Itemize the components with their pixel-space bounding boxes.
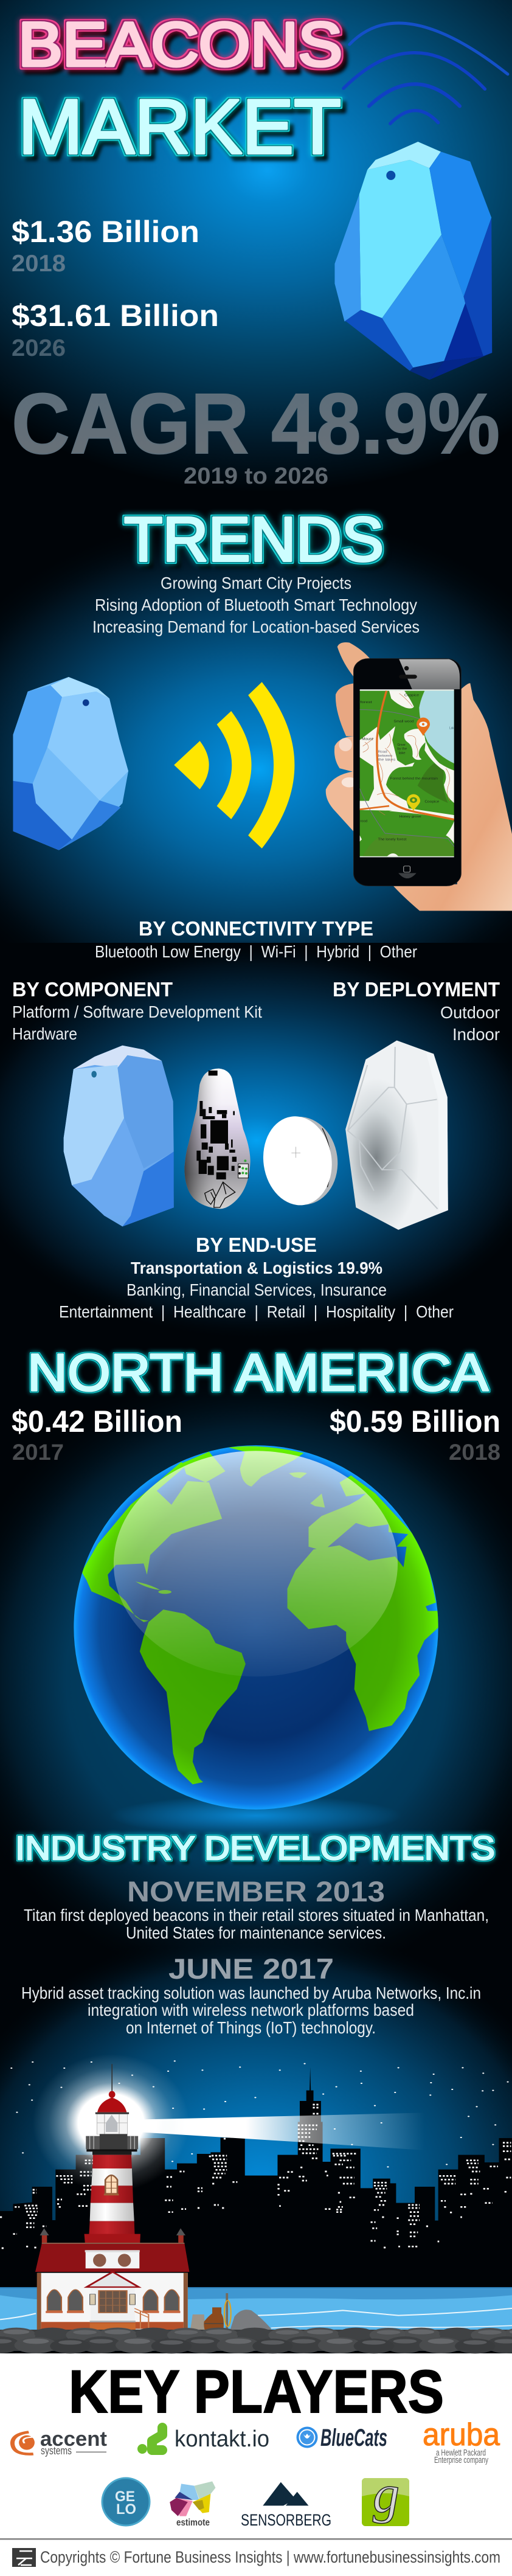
phone screen map: Grove	[397, 743, 406, 747]
skyline	[0, 2067, 512, 2288]
segment: end-use: Banking, Financial Services, Insurance	[126, 1280, 387, 1299]
icon: blue faceted beacon	[334, 142, 492, 380]
stat: North America 2017	[12, 1404, 182, 1465]
phone screen map: Honey grove	[400, 815, 421, 819]
stat: 2026 market value	[12, 299, 219, 361]
icon: blue signal arcs	[344, 23, 508, 123]
phone screen map	[360, 689, 454, 857]
lighthouse	[35, 2064, 189, 2335]
text block: trends list	[92, 574, 420, 636]
footer background: white panel	[0, 2353, 512, 2576]
stat: North America 2018: 2018	[449, 1440, 500, 1465]
development: June 2017: integration with wireless network platforms based	[88, 2001, 414, 2019]
heading: Trends: TRENDS	[124, 504, 384, 574]
phone screen map: rood	[360, 820, 367, 824]
segment: connectivity type: BY CONNECTIVITY TYPE	[139, 917, 373, 940]
text block: trends list: Growing Smart City Projects	[161, 574, 351, 592]
stat: 2018 market value: 2018	[12, 251, 66, 277]
phone screen map: The lonely forest	[378, 838, 407, 842]
icon: beacon casing	[64, 1046, 174, 1226]
development: November 2013: United States for maintenance services.	[126, 1923, 386, 1942]
logo: aruba: a Hewlett Packard	[436, 2448, 486, 2458]
stat: North America 2017: 2017	[12, 1440, 64, 1465]
logo: estimote: estimote	[176, 2518, 210, 2528]
stat: 2026 market value: $31.61 Billion	[12, 299, 219, 333]
development: November 2013: NOVEMBER 2013	[127, 1875, 385, 1908]
icon: hand holding phone with map	[326, 642, 512, 911]
icon: light blue beacon left	[13, 677, 128, 850]
phone screen map: Mount	[362, 738, 373, 741]
stat: CAGR: 2019 to 2026	[184, 463, 328, 489]
icon: globe	[74, 1445, 438, 1836]
heading: Key Players: KEY PLAYERS	[69, 2358, 444, 2425]
logo: Sensorberg	[241, 2482, 331, 2529]
stat: North America 2018: $0.59 Billion	[330, 1404, 500, 1439]
stat: North America 2017: $0.42 Billion	[12, 1404, 182, 1439]
phone screen map: the lakes	[378, 759, 395, 762]
segment: end-use: BY END-USE	[196, 1234, 317, 1256]
phone screen map: forest	[360, 701, 372, 704]
lighthouse glow	[33, 2054, 189, 2192]
decorative rocks row	[0, 2327, 512, 2354]
icon: beacon hardware parts	[64, 1041, 448, 1230]
logo: green g app icon: g	[373, 2465, 400, 2524]
development: June 2017: on Internet of Things (IoT) technology.	[126, 2018, 376, 2037]
logo: GELO	[102, 2478, 150, 2526]
heading: Industry Developments: INDUSTRY DEVELOPMENTS	[15, 1829, 495, 1867]
icon: coin battery	[258, 1112, 344, 1210]
segment: end-use: Transportation & Logistics 19.9%	[131, 1258, 382, 1277]
stat: 2026 market value: 2026	[12, 335, 66, 361]
divider	[0, 2538, 512, 2540]
phone screen map: Road	[378, 750, 387, 754]
segment: deployment: Outdoor	[440, 1003, 500, 1022]
phone screen map: lake	[399, 751, 406, 755]
segment: end-use	[59, 1234, 454, 1321]
segment: component: BY COMPONENT	[12, 978, 173, 1001]
logo: estimote	[170, 2481, 215, 2528]
segment: deployment: BY DEPLOYMENT	[333, 978, 500, 1001]
phone screen map: Lak	[449, 726, 454, 730]
logo: GELO: GE	[115, 2488, 135, 2505]
logo: green g app icon	[362, 2465, 409, 2526]
development: June 2017: JUNE 2017	[168, 1953, 334, 1985]
segment: component: Platform / Software Development Kit	[12, 1002, 262, 1021]
icon: yellow signal waves	[174, 682, 294, 849]
lit windows	[0, 2105, 511, 2248]
title: Market: MARKET	[18, 83, 341, 170]
logo: accent systems	[12, 2428, 107, 2457]
phone screen map: Coppice	[404, 694, 419, 698]
logo: BlueCats	[297, 2425, 387, 2451]
phone screen map: Forest behind the mountain	[390, 777, 438, 781]
phone screen map: between	[378, 754, 392, 758]
phone screen map: Coopice	[424, 800, 439, 804]
segment: deployment	[333, 978, 500, 1044]
text block: trends list: Rising Adoption of Bluetooth Smart Technology	[95, 595, 417, 614]
icon: circuit board	[184, 1069, 251, 1209]
segment: end-use: Entertainment | Healthcare | Retail | Hospitality | Other	[59, 1302, 454, 1321]
logo: GELO: LO	[116, 2501, 136, 2518]
logo: accent systems: accent	[40, 2428, 107, 2451]
logo: aruba: aruba	[423, 2417, 500, 2453]
stars	[12, 2061, 508, 2183]
segment: connectivity type: Bluetooth Low Energy | Wi-Fi | Hybrid | Other	[95, 942, 417, 961]
logo: accent systems: systems	[41, 2445, 72, 2457]
logo: BlueCats: BlueCats	[320, 2425, 387, 2451]
phone screen map: by the	[397, 748, 407, 751]
development: June 2017	[21, 1953, 481, 2037]
segment: component	[12, 978, 262, 1043]
illustration: night city with lighthouse	[0, 2054, 512, 2336]
logo: kontakt.io: kontakt.io	[175, 2426, 269, 2452]
development: November 2013	[24, 1875, 489, 1942]
heading: North America: NORTH AMERICA	[27, 1344, 489, 1402]
icon: Fortune Business Insights logo	[12, 2548, 36, 2567]
stat: North America 2018	[330, 1404, 500, 1465]
title: Beacons: BEACONS	[18, 10, 342, 79]
sea	[0, 2287, 512, 2331]
logo: Sensorberg: SENSORBERG	[241, 2511, 331, 2529]
light beam	[127, 2113, 424, 2150]
text block: trends list: Increasing Demand for Location-based Services	[92, 617, 420, 636]
stat: 2018 market value	[12, 215, 199, 277]
barrel and rock props	[189, 2293, 271, 2336]
segment: deployment: Indoor	[452, 1025, 500, 1044]
icon: white beacon shell	[345, 1041, 448, 1230]
logo: kontakt.io	[137, 2426, 269, 2454]
segment: component: Hardware	[12, 1024, 77, 1043]
phone screen map: Small wood	[393, 720, 414, 723]
stat: 2018 market value: $1.36 Billion	[12, 215, 199, 249]
segment: connectivity type	[95, 917, 417, 961]
